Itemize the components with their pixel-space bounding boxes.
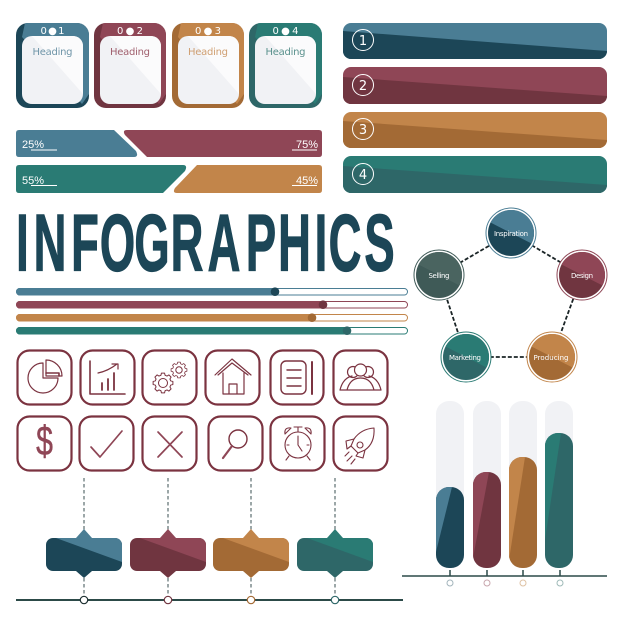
card 01: 0 ● 1 — [40, 26, 64, 37]
bar: 45 percent — [174, 165, 322, 193]
card 02 — [94, 23, 166, 108]
node: Inspiration: Inspiration — [494, 230, 528, 238]
tag: orange — [213, 529, 289, 604]
icon: pie chart — [18, 350, 72, 404]
slider: orange — [16, 313, 408, 322]
banner 3: 3 — [359, 123, 367, 138]
icon: rocket — [334, 416, 388, 470]
panel: percentage split bars — [16, 130, 322, 193]
bar: 25 percent — [16, 130, 137, 157]
card 01: Heading — [32, 47, 72, 58]
dashed connectors — [84, 478, 335, 596]
card 03: Heading — [188, 47, 228, 58]
node: Marketing: Marketing — [449, 354, 481, 362]
banner 4: 4 — [359, 168, 367, 183]
node: Producing — [527, 332, 577, 382]
node: Producing: Producing — [534, 354, 568, 362]
card 04 — [249, 23, 322, 108]
node: Design: Design — [571, 272, 593, 280]
slider: teal — [16, 326, 408, 335]
banner 4 — [343, 156, 607, 193]
axis — [402, 570, 607, 576]
banner 1: 1 — [359, 34, 367, 49]
card 03 — [172, 23, 244, 108]
icon: document — [270, 350, 324, 404]
dashed connectors — [439, 233, 582, 357]
icon: magnifier — [208, 416, 262, 470]
panel: progress sliders — [16, 287, 408, 335]
bar: 75 percent: 75% — [296, 139, 318, 151]
node: Inspiration — [486, 208, 536, 258]
column 3 — [509, 401, 537, 586]
card 04: 0 ● 4 — [272, 26, 298, 37]
card 03: 0 ● 3 — [195, 26, 221, 37]
tag: teal — [297, 529, 373, 604]
icon: team — [334, 350, 388, 404]
column 4 — [545, 401, 573, 586]
chart: process cycle — [414, 208, 607, 382]
icon: house — [206, 350, 260, 404]
icon: dollar: $ — [36, 417, 53, 464]
icon: dollar — [18, 416, 72, 470]
timeline axis — [16, 599, 403, 601]
icon: alarm clock — [270, 416, 324, 470]
tag: blue — [46, 529, 122, 604]
chart: column bars — [402, 401, 607, 586]
card 04: Heading — [266, 47, 306, 58]
icon: check — [80, 416, 134, 470]
node: Selling — [414, 250, 464, 300]
panel: numbered banners — [343, 23, 607, 193]
banner 1 — [343, 23, 607, 59]
card 02: Heading — [110, 47, 150, 58]
bar: 45 percent: 45% — [296, 175, 318, 187]
bar: 75 percent — [124, 130, 322, 157]
icon: cross — [142, 416, 196, 470]
panel: icon grid — [18, 350, 388, 470]
icon: gears — [142, 350, 196, 404]
panel: heading cards — [16, 23, 322, 108]
bar: 55 percent: 55% — [22, 175, 44, 187]
column 1 — [436, 401, 464, 586]
tag: red — [130, 529, 206, 604]
panel: timeline — [16, 478, 403, 604]
banner 2 — [343, 67, 607, 104]
column 2 — [473, 401, 501, 586]
bar: 55 percent — [16, 165, 186, 193]
bar: 25 percent: 25% — [22, 139, 44, 151]
card 01 — [16, 23, 89, 108]
card 02: 0 ● 2 — [117, 26, 143, 37]
node: Design — [557, 250, 607, 300]
node: Marketing — [441, 332, 491, 382]
slider: red — [16, 300, 408, 309]
slider: blue — [16, 287, 408, 296]
icon: growth chart — [80, 350, 134, 404]
banner 3 — [343, 112, 607, 148]
title: INFOGRAPHICS — [16, 198, 395, 288]
banner 2: 2 — [359, 79, 367, 94]
node: Selling: Selling — [428, 272, 450, 280]
